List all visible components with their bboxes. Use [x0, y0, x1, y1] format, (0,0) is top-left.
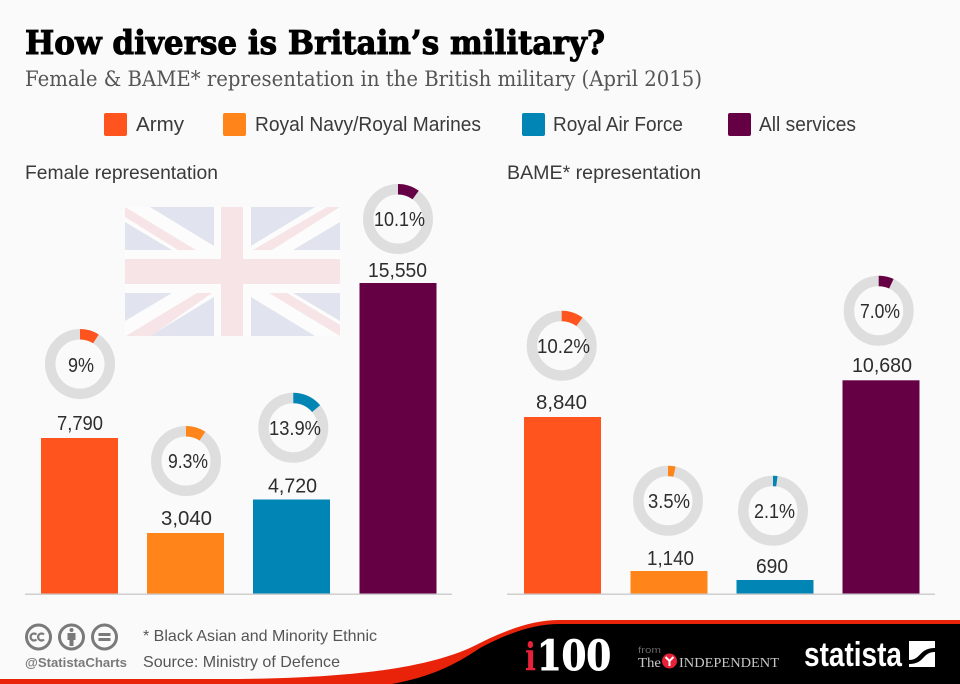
bar: Army 8,840: 8,840	[536, 392, 587, 414]
bar: Royal Air Force 4,720	[253, 476, 330, 594]
donut: Royal Navy 9.3%: 9.3%	[168, 451, 208, 473]
bar: Royal Navy 1,140	[630, 548, 708, 594]
legend item: Royal Navy/Royal Marines: Royal Navy/Royal Marines	[255, 114, 481, 136]
panel: female representation chart	[25, 189, 452, 595]
logo: from The Independent: INDEPENDENT	[679, 656, 779, 671]
bar: Army 8,840	[524, 392, 601, 594]
subtitle: Female & BAME* representation in the British military (April 2015)	[25, 67, 702, 91]
logo: i100: i	[525, 634, 536, 679]
donut: Royal Air Force 13.9%: 13.9%	[269, 418, 321, 440]
logo: from The Independent: from	[638, 645, 661, 656]
donut: Army 10.2%	[532, 316, 591, 375]
bar: Royal Air Force 4,720: 4,720	[268, 476, 317, 498]
donut: Royal Air Force 2.1%: 2.1%	[754, 501, 795, 523]
icons: creative commons licence	[26, 625, 116, 649]
legend item: All services: All services	[759, 114, 856, 136]
donut: Royal Navy 3.5%	[638, 471, 698, 530]
heading: female representation: Female representation	[25, 163, 218, 184]
logo: i100: 100	[537, 632, 611, 680]
heading: BAME representation: BAME* representation	[507, 163, 701, 184]
panel: BAME representation chart	[507, 281, 935, 595]
title: How diverse is Britain’s military?	[25, 23, 605, 62]
axis	[507, 594, 935, 595]
logo: statista: statista	[804, 636, 903, 674]
bar: All services 10,680: 10,680	[852, 355, 912, 377]
bar: Royal Air Force 690	[736, 556, 814, 594]
donut: Royal Air Force 13.9%	[264, 398, 323, 457]
bar: Royal Navy 3,040	[147, 508, 224, 594]
donut: Royal Navy 9.3%	[156, 431, 216, 491]
donut: Army 9%	[50, 334, 110, 394]
axis	[25, 594, 452, 595]
donut: All services 7.0%: 7.0%	[860, 301, 900, 323]
logo: from The Independent	[638, 645, 779, 671]
footer band	[0, 620, 960, 684]
donut: All services 7.0%	[849, 281, 908, 340]
bar: All services 15,550: 15,550	[368, 260, 427, 282]
donut: Army 10.2%: 10.2%	[537, 336, 590, 358]
logo: from The Independent: The	[638, 656, 661, 671]
source: Source: Ministry of Defence	[143, 654, 340, 671]
bar: Army 7,790: 7,790	[57, 413, 103, 435]
legend item: Army: Army	[136, 114, 184, 136]
icon: union flag watermark	[125, 207, 340, 336]
footnote: * Black Asian and Minority Ethnic	[143, 628, 377, 645]
bar: Royal Navy 1,140: 1,140	[647, 548, 694, 570]
legend item: Royal Air Force: Royal Air Force	[553, 114, 683, 136]
bar: Royal Air Force 690: 690	[756, 556, 788, 578]
bar: Army 7,790	[41, 413, 118, 594]
legend	[104, 113, 856, 136]
legend item: Army	[104, 113, 184, 136]
bar: All services 15,550	[360, 260, 436, 594]
donut: Royal Air Force 2.1%	[743, 481, 803, 540]
donut: All services 10.1%: 10.1%	[374, 209, 425, 231]
donut: Royal Navy 3.5%: 3.5%	[648, 491, 690, 513]
donut: All services 10.1%	[368, 189, 428, 249]
credit: StatistaCharts: @StatistaCharts	[25, 656, 127, 670]
donut: Army 9%: 9%	[68, 355, 94, 377]
bar: All services 10,680	[842, 355, 920, 594]
bar: Royal Navy 3,040: 3,040	[161, 508, 212, 530]
